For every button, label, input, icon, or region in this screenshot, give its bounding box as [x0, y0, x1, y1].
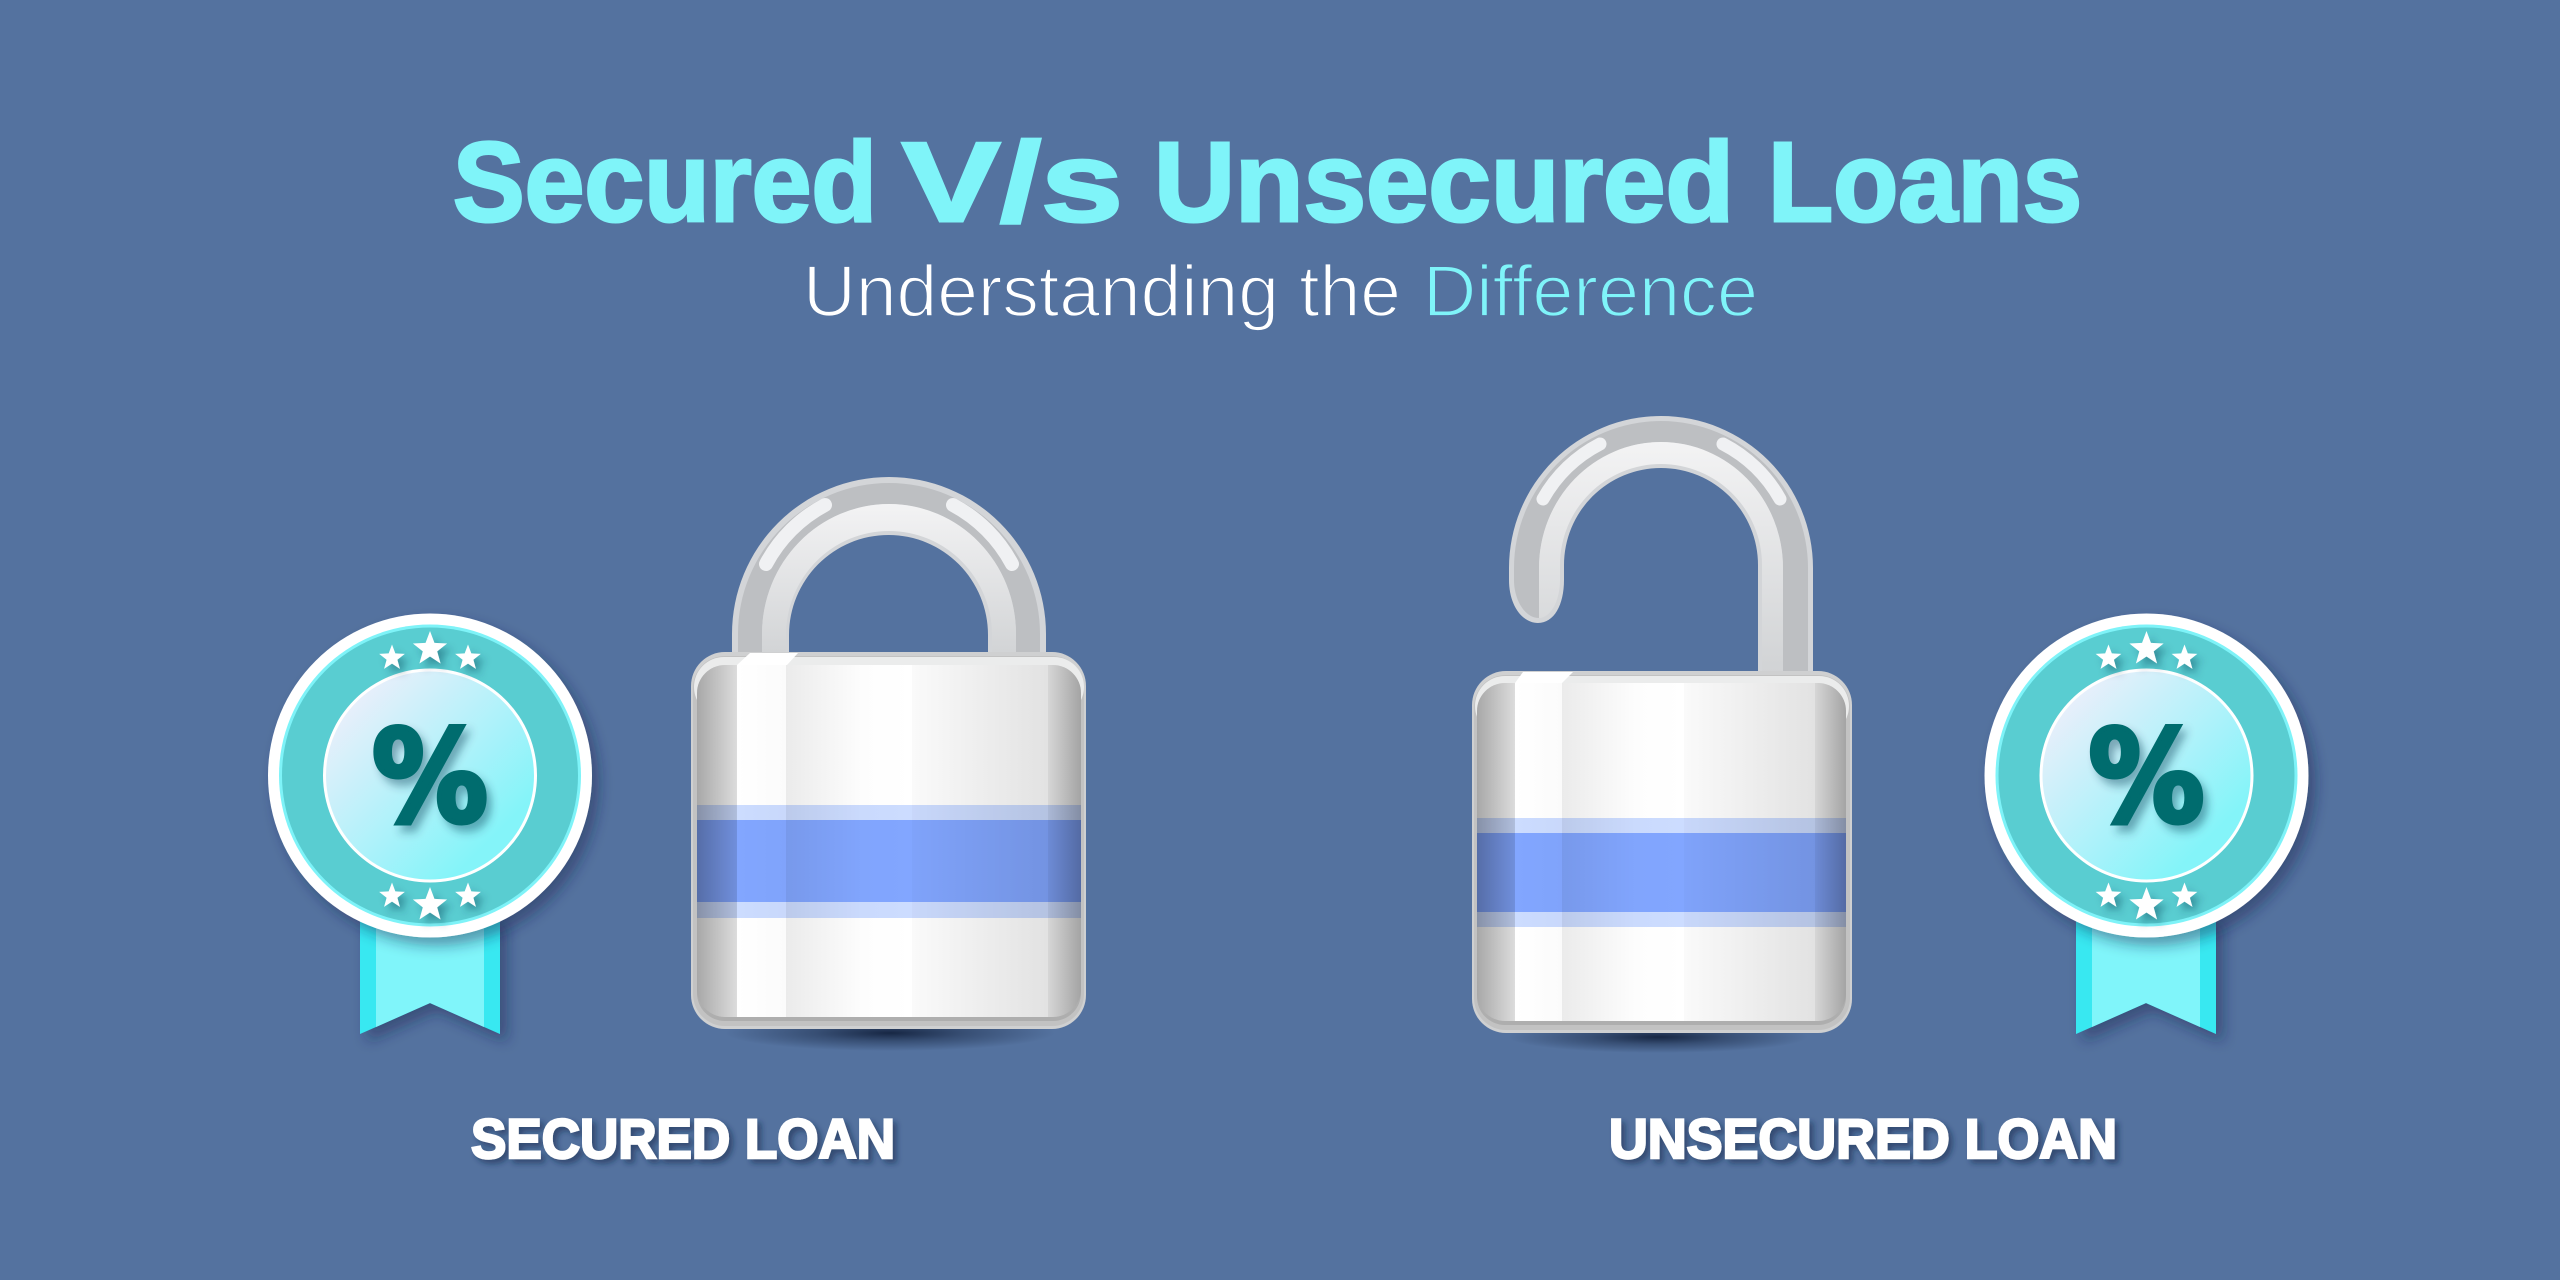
- medal disc: secured: [268, 614, 592, 938]
- shackle: closed: [732, 477, 1046, 662]
- badge: unsecured loan: [1984, 614, 2308, 1034]
- ribbon: unsecured: [2076, 915, 2216, 1034]
- lock body: closed: [691, 652, 1086, 1029]
- stars: unsecured: [2096, 631, 2197, 920]
- medal disc: unsecured: [1984, 614, 2308, 938]
- title: Unsecured: [1154, 119, 1734, 245]
- floor shadow: open: [1508, 1021, 1808, 1053]
- lock body: open: [1472, 671, 1852, 1033]
- floor shadow: closed: [725, 1015, 1055, 1051]
- subtitle: Difference: [1423, 252, 1758, 332]
- title: Loans: [1768, 119, 2082, 245]
- badge: secured loan: [268, 614, 592, 1034]
- colour band: closed: [697, 805, 1081, 918]
- percent sign: secured: %: [372, 703, 488, 851]
- ribbon: secured: [360, 915, 500, 1034]
- title: Secured: [453, 119, 877, 245]
- title: [453, 119, 2082, 245]
- shackle: open: [1509, 416, 1813, 680]
- percent sign: unsecured: %: [2088, 703, 2205, 851]
- stars: secured: [379, 631, 481, 920]
- padlock: closed: [691, 477, 1086, 1051]
- subtitle: [803, 252, 1758, 332]
- subtitle: Understanding the: [803, 252, 1401, 332]
- colour band: open: [1477, 818, 1846, 927]
- padlock: open: [1472, 416, 1852, 1053]
- label: secured loan: SECURED LOAN: [471, 1107, 895, 1170]
- label: unsecured loan: UNSECURED LOAN: [1609, 1107, 2117, 1170]
- title: V/s: [902, 119, 1123, 245]
